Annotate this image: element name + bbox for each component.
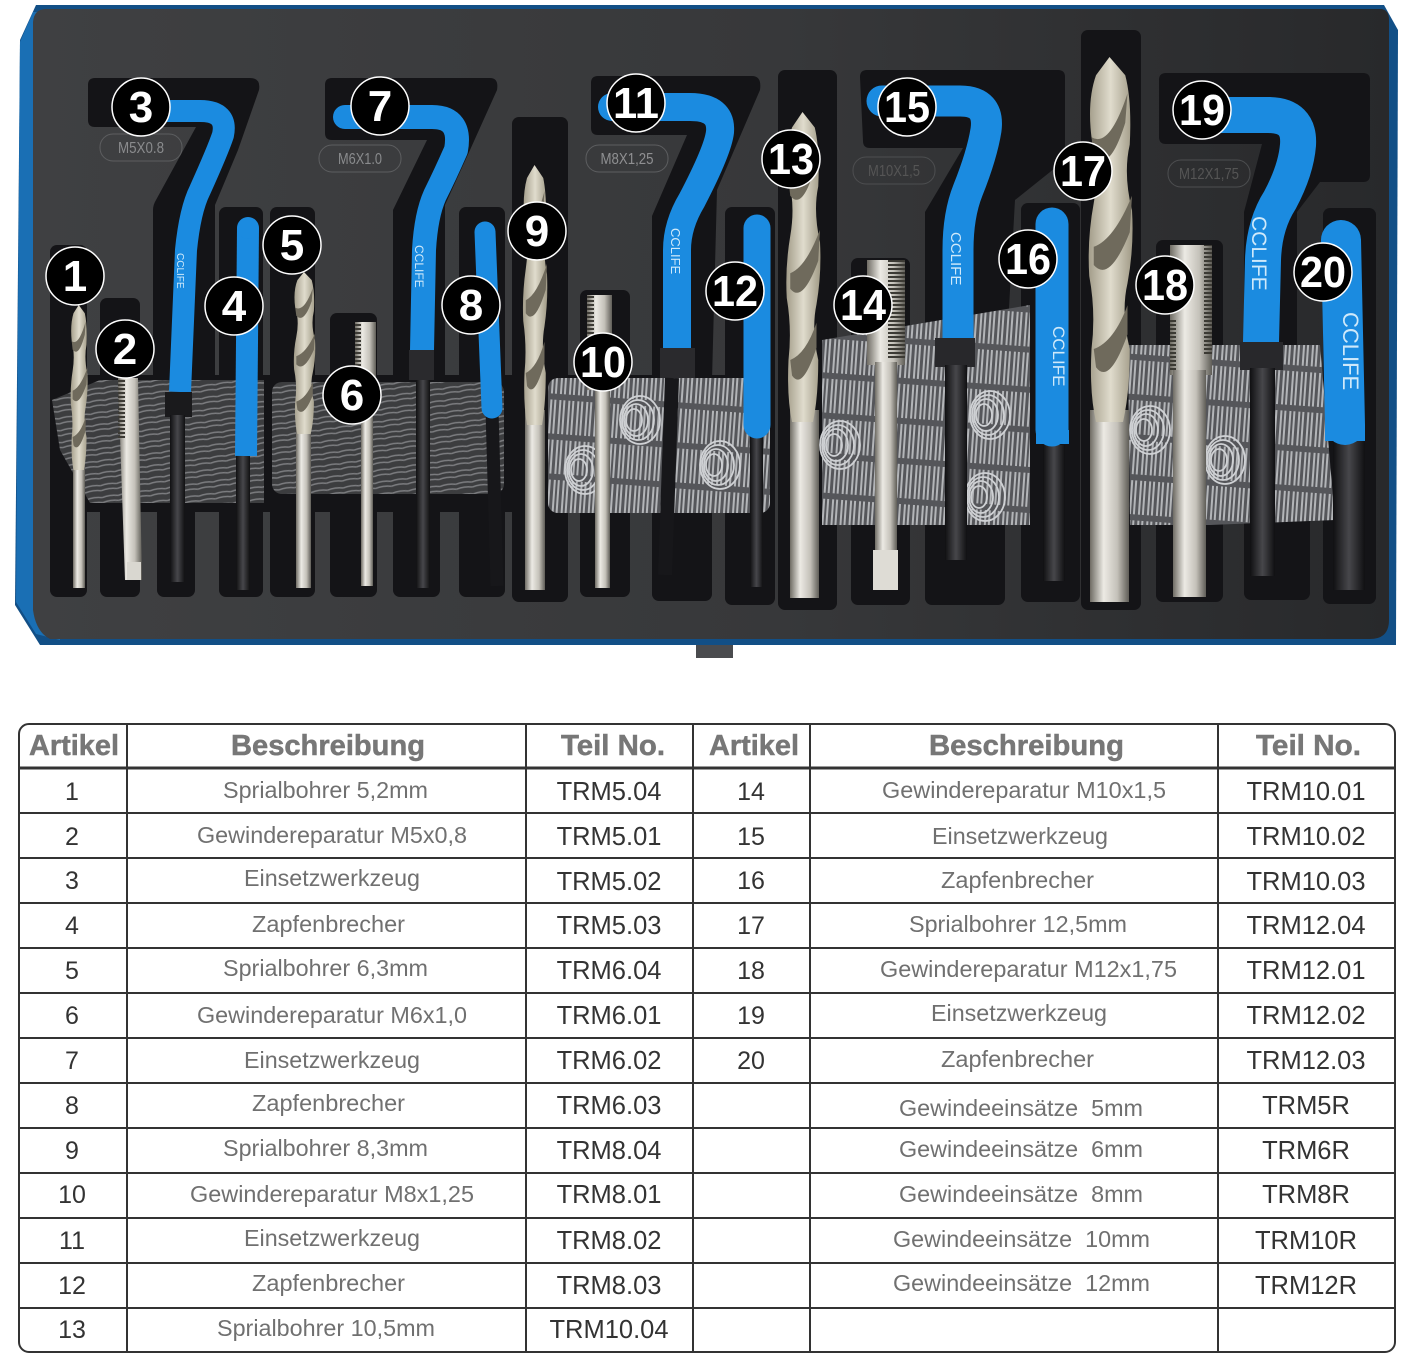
left table rows: Einsetzwerkzeug — [244, 1047, 420, 1073]
tap 10 — [587, 295, 612, 588]
size labels moulded in foam: M12X1,75 — [1179, 166, 1239, 183]
badge 1 — [46, 247, 104, 305]
number badges — [46, 74, 1352, 424]
badge 7 — [351, 77, 409, 135]
right table rows: 16 — [737, 867, 765, 895]
installation tool 15 — [882, 101, 986, 560]
right table rows: Gewindeeinsätze 6mm — [899, 1136, 1143, 1162]
left table rows: Zapfenbrecher — [252, 1270, 405, 1296]
size labels moulded in foam: M10X1,5 — [868, 163, 920, 180]
table header: Beschreibung — [929, 730, 1124, 762]
tang break tool 4 — [236, 217, 259, 590]
drill bit 5 — [294, 272, 315, 588]
table header: Artikel — [29, 730, 119, 762]
badge 18: 18 — [1142, 261, 1188, 310]
left table rows: Einsetzwerkzeug — [244, 865, 420, 891]
badge 10: 10 — [580, 338, 626, 387]
left table rows: Gewindereparatur M8x1,25 — [190, 1181, 474, 1207]
drill bit 17 — [1089, 57, 1133, 602]
right table rows: Gewindeeinsätze 12mm — [893, 1270, 1150, 1296]
left table rows: TRM6.02 — [557, 1047, 661, 1075]
right table rows: TRM8R — [1262, 1181, 1350, 1209]
right table rows — [737, 777, 1366, 1300]
tang break tool 20 — [1325, 240, 1365, 590]
left table rows: TRM6.01 — [557, 1002, 661, 1030]
right table rows: 18 — [737, 957, 765, 985]
left table rows: Sprialbohrer 8,3mm — [223, 1135, 428, 1161]
left table rows: 13 — [58, 1316, 86, 1344]
right table rows: Gewindeeinsätze 8mm — [899, 1181, 1143, 1207]
installation tool 7 — [345, 117, 457, 588]
installation tool 11: CCLIFE — [668, 228, 683, 275]
right table rows: TRM12.02 — [1246, 1002, 1366, 1030]
right table rows: TRM10R — [1255, 1227, 1357, 1255]
right table rows: TRM10.01 — [1246, 778, 1366, 806]
installation tool 3: CCLIFE — [174, 253, 185, 289]
tang break tool 16: CCLIFE — [1049, 326, 1068, 386]
tang break tool 16 — [1036, 224, 1069, 581]
left table rows: TRM5.02 — [557, 868, 661, 896]
right table rows: Gewindereparatur M12x1,75 — [880, 956, 1177, 982]
badge 17: 17 — [1060, 147, 1106, 196]
badge 2 — [96, 320, 154, 378]
left table rows: TRM8.02 — [557, 1227, 661, 1255]
case latch — [696, 645, 733, 658]
right table rows: 14 — [737, 778, 765, 806]
badge 11 — [607, 74, 665, 132]
left table rows: 10 — [58, 1181, 86, 1209]
badge 6 — [323, 366, 381, 424]
badge 12: 12 — [712, 267, 758, 316]
left table rows: Sprialbohrer 6,3mm — [223, 955, 428, 981]
tang break tool 12 — [750, 228, 763, 587]
badge 3: 3 — [129, 83, 153, 132]
left table rows: 1 — [65, 778, 79, 806]
badge 19: 19 — [1179, 86, 1225, 135]
tang break tool 8 — [485, 232, 497, 586]
badge 5 — [263, 216, 321, 274]
left table rows: TRM5.01 — [557, 823, 661, 851]
table header: Teil No. — [1256, 730, 1361, 762]
badge 8 — [442, 276, 500, 334]
size labels moulded in foam: M8X1,25 — [600, 151, 654, 168]
right table rows: TRM12.01 — [1246, 957, 1366, 985]
installation tool 19: CCLIFE — [1247, 216, 1270, 291]
tap 18 — [1170, 245, 1212, 597]
installation tool 11 — [612, 107, 720, 575]
left table rows: TRM10.04 — [549, 1316, 669, 1344]
left table rows: Zapfenbrecher — [252, 911, 405, 937]
right table rows: TRM6R — [1262, 1137, 1350, 1165]
tap 2 — [118, 378, 142, 580]
right table rows: TRM12R — [1255, 1272, 1357, 1300]
installation tool 19 — [1212, 115, 1298, 576]
badge 14: 14 — [840, 281, 886, 330]
badge 2: 2 — [113, 325, 137, 374]
left table rows: TRM8.03 — [557, 1272, 661, 1300]
table header: Teil No. — [561, 730, 665, 762]
table header: Artikel — [709, 730, 799, 762]
tang break tool 20: CCLIFE — [1338, 312, 1363, 390]
badge 4 — [205, 277, 263, 335]
badge 11: 11 — [613, 79, 659, 128]
right table rows: 15 — [737, 823, 765, 851]
size labels moulded in foam — [100, 134, 1250, 187]
left table rows: 3 — [65, 867, 79, 895]
right table rows: TRM10.02 — [1246, 823, 1366, 851]
badge 20: 20 — [1300, 248, 1346, 297]
left table rows — [58, 777, 669, 1344]
badge 6: 6 — [340, 371, 364, 420]
badge 16: 16 — [1005, 235, 1051, 284]
left table rows: 6 — [65, 1002, 79, 1030]
right table rows: Zapfenbrecher — [941, 867, 1094, 893]
installation tool 7: CCLIFE — [412, 245, 426, 288]
badge 7: 7 — [368, 82, 392, 131]
tap 6 — [355, 322, 376, 586]
badge 8: 8 — [459, 281, 483, 330]
right table rows: TRM12.03 — [1246, 1047, 1366, 1075]
left table rows: 9 — [65, 1137, 79, 1165]
right table rows: Einsetzwerkzeug — [931, 1000, 1107, 1026]
badge 15: 15 — [884, 83, 930, 132]
right table rows: 20 — [737, 1047, 765, 1075]
tap 14 — [867, 260, 905, 590]
right table rows: Gewindeeinsätze 5mm — [899, 1095, 1143, 1121]
installation tool 15: CCLIFE — [947, 232, 964, 285]
blue metal case — [15, 5, 1398, 645]
right table rows: Einsetzwerkzeug — [932, 823, 1108, 849]
right table rows: Zapfenbrecher — [941, 1046, 1094, 1072]
left table rows: 12 — [58, 1272, 86, 1300]
left table rows: TRM6.03 — [557, 1092, 661, 1120]
size labels moulded in foam: M6X1.0 — [338, 151, 382, 168]
left table rows: TRM5.04 — [557, 778, 661, 806]
left table rows: TRM8.01 — [557, 1181, 661, 1209]
badge 9: 9 — [525, 207, 549, 256]
installation tool 3 — [140, 111, 224, 582]
badge 13: 13 — [768, 135, 814, 184]
right table rows: TRM5R — [1262, 1092, 1350, 1120]
tool case — [15, 5, 1398, 658]
parts table — [19, 724, 1395, 1352]
right table rows: Sprialbohrer 12,5mm — [909, 911, 1127, 937]
left table rows: Zapfenbrecher — [252, 1090, 405, 1116]
left table rows: 7 — [65, 1047, 79, 1075]
left table rows: Gewindereparatur M5x0,8 — [197, 822, 467, 848]
left table rows: Sprialbohrer 10,5mm — [217, 1315, 435, 1341]
thread insert bags — [52, 305, 1335, 525]
badge 1: 1 — [63, 252, 87, 301]
recessed tool slots — [50, 30, 1376, 610]
left table rows: Sprialbohrer 5,2mm — [223, 777, 428, 803]
left table rows: Gewindereparatur M6x1,0 — [197, 1002, 467, 1028]
left table rows: 8 — [65, 1092, 79, 1120]
drill bit 9 — [523, 165, 547, 590]
badge 3 — [112, 78, 170, 136]
badge 4: 4 — [222, 282, 247, 331]
badge 5: 5 — [280, 221, 304, 270]
left table rows: 11 — [59, 1227, 85, 1255]
right table rows: 19 — [737, 1002, 765, 1030]
badge 9 — [508, 202, 566, 260]
right table rows: Gewindereparatur M10x1,5 — [882, 777, 1166, 803]
right table rows: TRM12.04 — [1246, 912, 1366, 940]
right table rows: 17 — [737, 912, 765, 940]
left table rows: 5 — [65, 957, 79, 985]
drill bit 13 — [786, 112, 820, 598]
right table rows: TRM10.03 — [1246, 868, 1366, 896]
foam tray — [33, 9, 1389, 639]
left table rows: TRM5.03 — [557, 912, 661, 940]
left table rows: TRM6.04 — [557, 957, 661, 985]
drill bit 1 — [71, 305, 88, 588]
left table rows: 4 — [65, 912, 79, 940]
table header — [29, 730, 1361, 762]
left table rows: TRM8.04 — [557, 1137, 661, 1165]
size labels moulded in foam: M5X0.8 — [118, 140, 164, 157]
left table rows: Einsetzwerkzeug — [244, 1225, 420, 1251]
right table rows: Gewindeeinsätze 10mm — [893, 1226, 1150, 1252]
table header: Beschreibung — [231, 730, 425, 762]
left table rows: 2 — [65, 823, 79, 851]
